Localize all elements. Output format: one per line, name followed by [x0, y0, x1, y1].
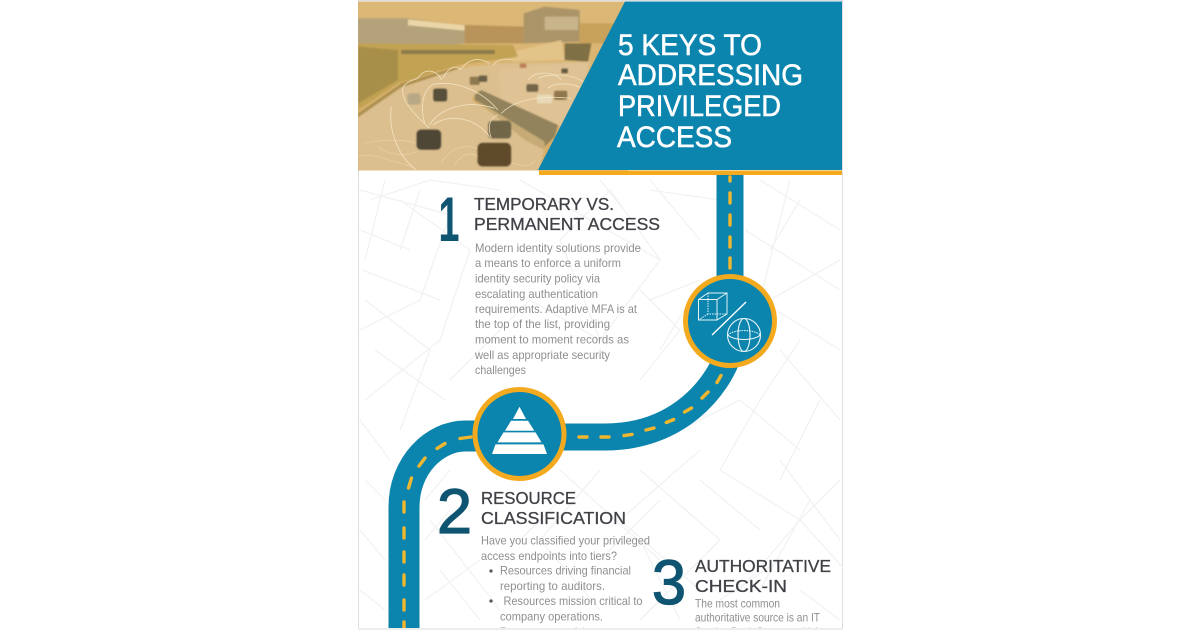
body 1: well as appropriate security: [474, 348, 610, 362]
heading 3: CHECK-IN: [695, 576, 787, 596]
title: ACCESS: [617, 121, 732, 154]
header banner: [538, 2, 842, 175]
body 1: Modern identity solutions provide: [475, 241, 641, 255]
title: [617, 29, 803, 154]
title: 5 KEYS TO: [618, 29, 762, 62]
winding road: [404, 175, 730, 630]
carriageways: [358, 62, 591, 170]
page bottom edge: [358, 628, 843, 630]
title: ADDRESSING: [618, 59, 803, 92]
body 2: company operations.: [500, 610, 603, 624]
section 1: temporary vs permanent access: [438, 185, 660, 377]
heading 1: TEMPORARY VS.: [474, 194, 614, 214]
body 1: a means to enforce a uniform: [475, 256, 621, 270]
body 1: the top of the list, providing: [475, 317, 610, 331]
cube: [698, 293, 727, 320]
numeral 2: 2: [437, 477, 472, 547]
body 3: The most common: [695, 596, 780, 610]
body 2: Resources mission critical to: [504, 594, 643, 608]
heading 1: [474, 194, 660, 234]
body 2: Have you classified your privileged: [481, 534, 650, 548]
section 1 icon: cube and sphere: [686, 276, 774, 366]
body 2: [481, 534, 650, 630]
section 2: resource classification: [437, 477, 650, 630]
section 2 icon: tiered pyramid: [475, 390, 564, 478]
heading 2: [482, 492, 625, 524]
section 3: authoritative check-in: [654, 559, 830, 628]
banner background: [538, 2, 842, 170]
median wall: [475, 90, 558, 147]
embankment: [358, 43, 518, 110]
body 1: challenges: [475, 363, 526, 377]
page frame: [358, 0, 842, 628]
heading 2: RESOURCE: [481, 488, 576, 508]
road lane dashes: [404, 177, 730, 630]
body 3: authoritative source is an IT: [695, 610, 821, 624]
body 1: [474, 241, 641, 377]
numeral 3: 3: [652, 548, 686, 618]
heading 1: PERMANENT ACCESS: [474, 214, 660, 234]
distant buildings: [358, 18, 465, 45]
body 1: identity security policy via: [475, 272, 600, 286]
body 2: reporting to auditors.: [500, 579, 605, 593]
numeral 1: 1: [438, 185, 460, 255]
heading 3: AUTHORITATIVE: [695, 556, 831, 576]
header photo: highway with connected cars: [358, 1, 628, 171]
body 2: Resources driving financial: [500, 564, 631, 578]
bullets: [489, 569, 493, 603]
heading 3: [694, 560, 830, 592]
heading 2: CLASSIFICATION: [481, 508, 626, 528]
signal arcs: [391, 59, 583, 170]
title: PRIVILEGED: [618, 90, 781, 123]
banner underline: [539, 170, 842, 175]
body 3: [695, 599, 820, 628]
body 1: escalating authentication: [475, 287, 598, 301]
cars: [416, 129, 441, 150]
slash: [712, 302, 746, 335]
body 2: access endpoints into tiers?: [481, 549, 617, 563]
body 1: moment to moment records as: [475, 332, 629, 346]
sphere: [728, 318, 760, 352]
body 1: requirements. Adaptive MFA is at: [475, 302, 638, 316]
background street map pattern: [360, 180, 845, 620]
